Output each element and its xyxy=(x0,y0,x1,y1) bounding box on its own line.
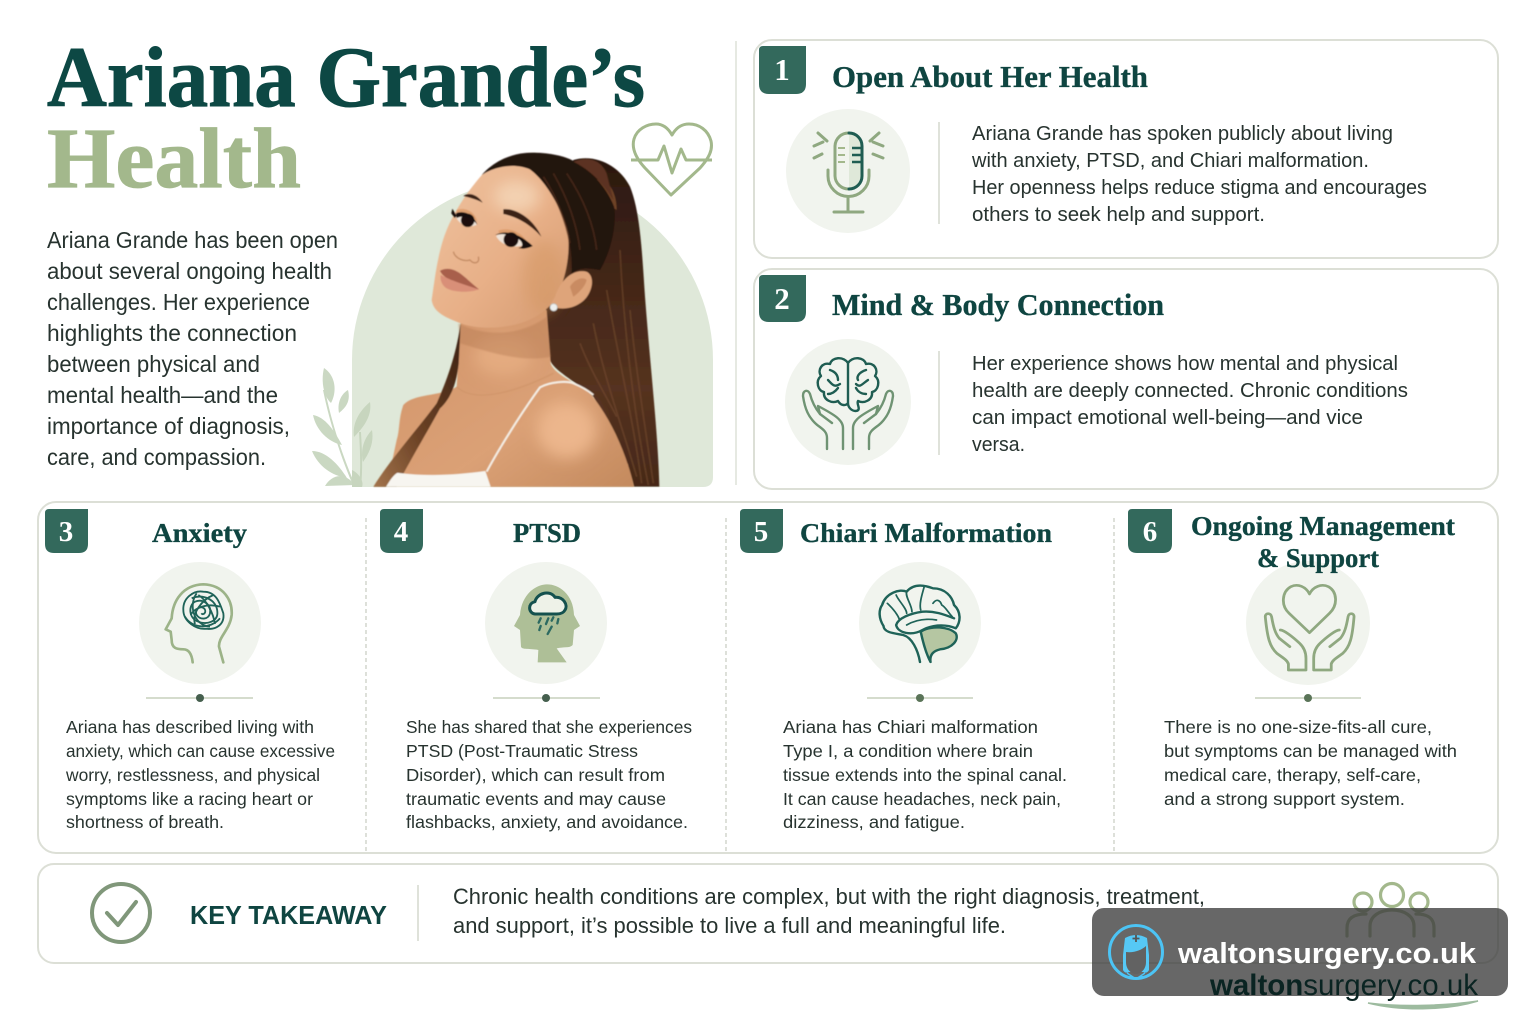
intro text block: challenges. Her experience xyxy=(47,289,310,315)
text chiari: Type I, a condition where brain xyxy=(783,741,1033,761)
intro text block: about several ongoing health xyxy=(47,258,332,284)
text chiari: tissue extends into the spinal canal. xyxy=(783,765,1067,785)
text chiari: It can cause headaches, neck pain, xyxy=(783,789,1061,809)
divider with dot xyxy=(493,694,600,702)
intro text block: care, and compassion. xyxy=(47,444,266,470)
text anxiety: anxiety, which can cause excessive xyxy=(66,741,335,761)
text 1: with anxiety, PTSD, and Chiari malformation. xyxy=(971,149,1369,172)
icon: heart with pulse xyxy=(631,124,712,195)
arch background xyxy=(352,180,713,487)
badge 1: 1 xyxy=(774,52,790,87)
text 1: Her openness helps reduce stigma and encourages xyxy=(972,176,1427,199)
ponytail hair xyxy=(540,158,659,487)
watermark badge xyxy=(1092,908,1508,996)
heading 2: Mind & Body Connection xyxy=(832,287,1164,322)
logo swoosh xyxy=(1368,1001,1478,1009)
title xyxy=(47,29,645,206)
icon: nurse avatar xyxy=(1110,926,1162,979)
badge 3: 3 xyxy=(59,516,73,548)
text anxiety: symptoms like a racing heart or xyxy=(66,789,313,809)
icon: people group xyxy=(1347,884,1434,936)
text ptsd: flashbacks, anxiety, and avoidance. xyxy=(406,812,688,832)
intro text block: importance of diagnosis, xyxy=(47,413,290,439)
body and neck xyxy=(387,310,634,487)
eye shadow xyxy=(457,209,527,242)
badge 3 xyxy=(45,509,88,553)
eyebrows xyxy=(463,194,483,203)
badge 5 xyxy=(740,509,783,553)
column: anxiety xyxy=(45,509,335,832)
text 2: can impact emotional well-being—and vice xyxy=(972,406,1363,429)
earring xyxy=(550,304,557,311)
text ongoing: but symptoms can be managed with xyxy=(1164,741,1457,761)
column: ptsd xyxy=(380,509,692,832)
title: Health xyxy=(47,110,301,206)
text ongoing: There is no one-size-fits-all cure, xyxy=(1164,717,1432,737)
badge 4 xyxy=(380,509,423,553)
text ptsd: traumatic events and may cause xyxy=(406,789,666,809)
heading ongoing management: Ongoing Management xyxy=(1191,510,1456,541)
panel: mind and body connection xyxy=(754,269,1498,489)
badge 4: 4 xyxy=(394,516,408,548)
column: ongoing management xyxy=(1128,509,1457,809)
text chiari: dizziness, and fatigue. xyxy=(783,812,965,832)
heading anxiety: Anxiety xyxy=(152,517,247,548)
text ptsd xyxy=(406,717,692,832)
face xyxy=(432,163,569,328)
intro text block: Ariana Grande has been open xyxy=(47,227,338,253)
text 2: versa. xyxy=(972,433,1025,456)
takeaway text: Chronic health conditions are complex, but with the right diagnosis, treatment, xyxy=(453,884,1205,909)
divider with dot xyxy=(1255,694,1361,702)
text 2: Her experience shows how mental and physical xyxy=(972,352,1398,375)
nose xyxy=(453,252,479,263)
text ongoing xyxy=(1164,717,1457,809)
text anxiety xyxy=(65,717,335,832)
icon: microphone xyxy=(786,109,910,233)
icon: brain with cerebellum xyxy=(859,562,981,684)
text ongoing: and a strong support system. xyxy=(1164,789,1405,809)
intro text block: mental health—and the xyxy=(47,382,278,408)
text anxiety: worry, restlessness, and physical xyxy=(65,765,320,785)
icon: head with tangled thoughts xyxy=(139,562,261,684)
vertical divider xyxy=(735,41,737,485)
badge 6 xyxy=(1128,509,1172,553)
top hair xyxy=(482,153,615,273)
text anxiety: Ariana has described living with xyxy=(66,717,314,737)
heading ongoing management xyxy=(1191,510,1456,573)
heading chiari: Chiari Malformation xyxy=(800,517,1052,548)
text 1: others to seek help and support. xyxy=(972,203,1265,226)
icon: brain in hands xyxy=(785,339,911,465)
badge 1 xyxy=(759,46,806,94)
title: Ariana Grande’s xyxy=(47,29,645,125)
icon: check circle xyxy=(92,884,150,942)
text ptsd: She has shared that she experiences xyxy=(406,717,692,737)
text 2 xyxy=(972,352,1408,456)
key takeaway label: KEY TAKEAWAY xyxy=(190,900,387,930)
text anxiety: shortness of breath. xyxy=(66,812,224,832)
icon: heart in hands xyxy=(1246,561,1370,685)
text chiari: Ariana has Chiari malformation xyxy=(783,717,1038,737)
text chiari xyxy=(783,717,1067,832)
badge 2: 2 xyxy=(774,281,790,316)
panel: conditions row xyxy=(38,502,1498,853)
portrait with arch background xyxy=(312,153,713,487)
heading ongoing management: & Support xyxy=(1257,542,1380,573)
strap xyxy=(487,382,593,472)
text 1: Ariana Grande has spoken publicly about living xyxy=(972,122,1393,145)
intro text block xyxy=(47,227,338,470)
ear xyxy=(550,271,592,309)
takeaway text xyxy=(453,884,1205,938)
column: chiari malformation xyxy=(740,509,1067,832)
divider with dot xyxy=(867,694,973,702)
white top xyxy=(386,471,491,487)
icon: head with storm cloud xyxy=(485,562,607,684)
takeaway text: and support, it’s possible to live a full and meaningful life. xyxy=(453,913,1006,938)
heading 1: Open About Her Health xyxy=(832,59,1148,94)
heading ptsd: PTSD xyxy=(513,517,581,548)
intro text block: highlights the connection xyxy=(47,320,297,346)
panel: key takeaway xyxy=(38,864,1498,963)
text ptsd: Disorder), which can result from xyxy=(406,765,665,785)
intro text block: between physical and xyxy=(47,351,260,377)
text 2: health are deeply connected. Chronic conditions xyxy=(972,379,1408,402)
eyes xyxy=(455,214,477,226)
badge 6: 6 xyxy=(1143,516,1157,548)
text ongoing: medical care, therapy, self-care, xyxy=(1164,765,1421,785)
badge 2 xyxy=(759,275,806,322)
logo text over watermark: waltonsurgery.co.uk xyxy=(1209,969,1479,1002)
lips xyxy=(440,269,479,289)
icon: leaves xyxy=(312,368,373,487)
panel: open about her health xyxy=(754,40,1498,258)
watermark url: waltonsurgery.co.uk xyxy=(1177,938,1477,970)
left hair lock xyxy=(373,323,461,487)
divider with dot xyxy=(146,694,253,702)
badge 5: 5 xyxy=(754,516,768,548)
text ptsd: PTSD (Post-Traumatic Stress xyxy=(406,741,638,761)
text 1 xyxy=(971,122,1427,226)
